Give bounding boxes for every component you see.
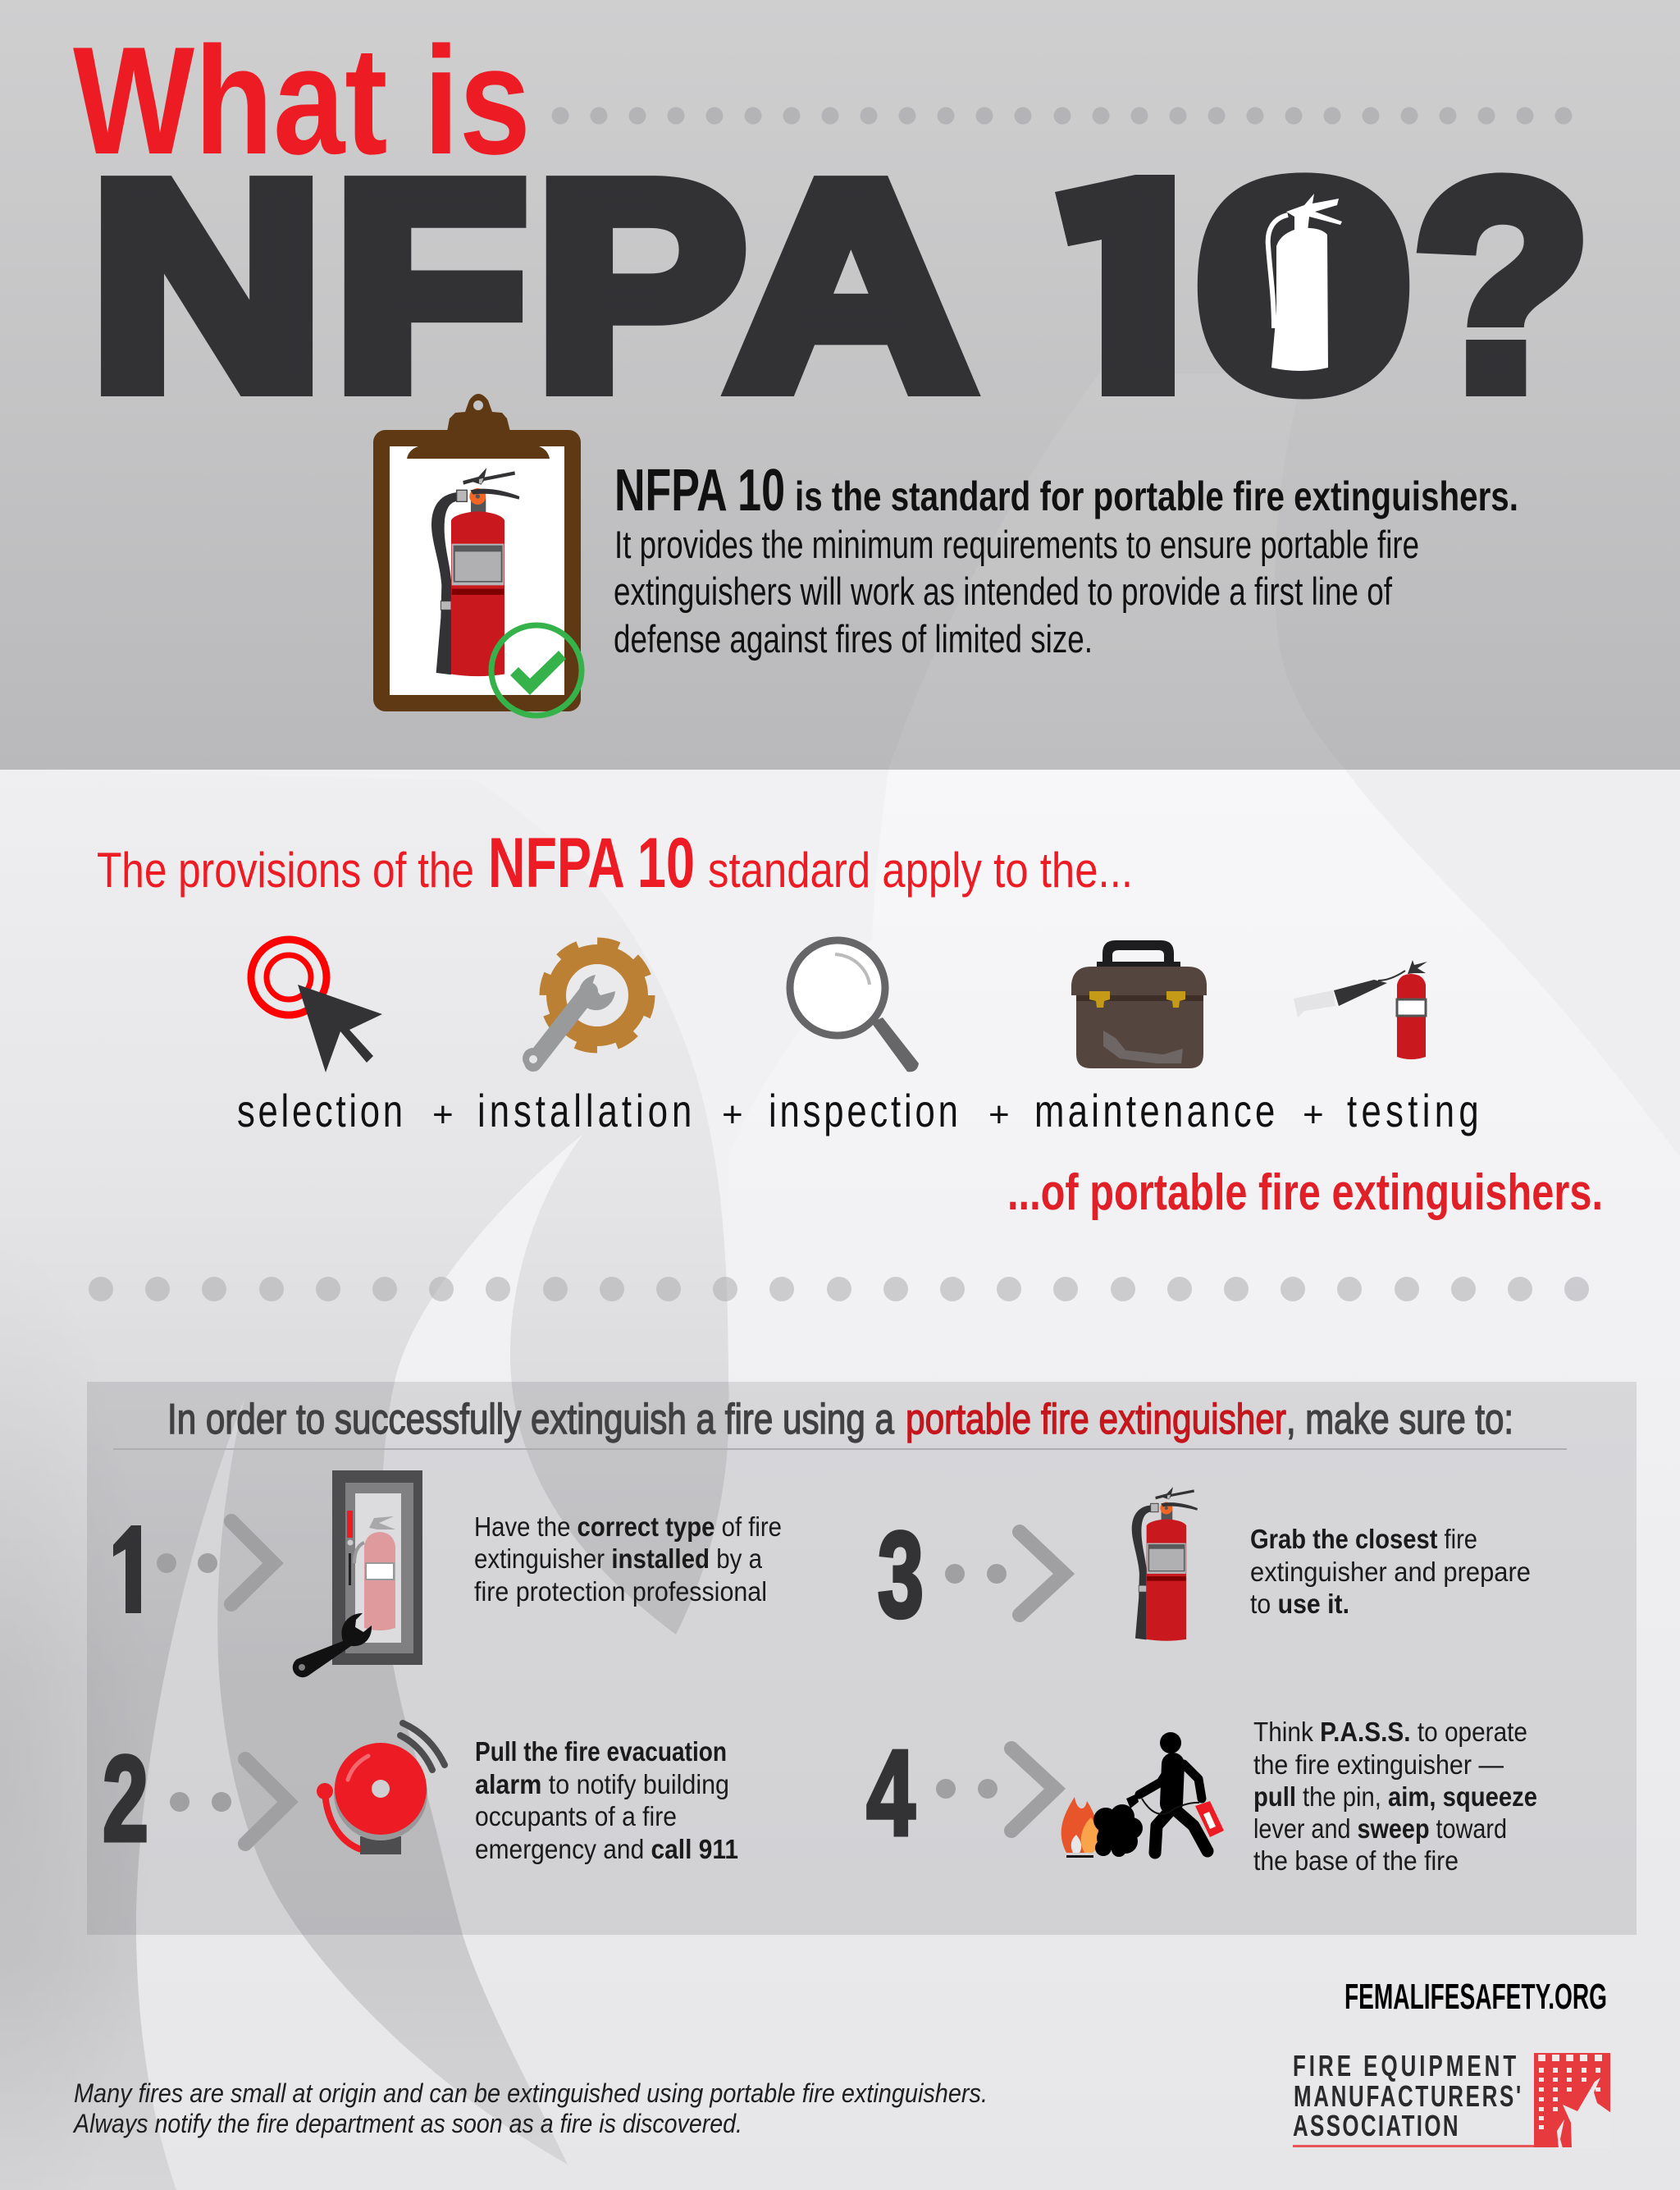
step 3 text: Grab the closest fire: [1250, 1524, 1477, 1554]
step 1 text: extinguisher installed by a: [474, 1543, 763, 1574]
logo: Fire Equipment Manufacturers' Association: FIRE EQUIPMENT: [1293, 2050, 1516, 2083]
labels: selection + installation + inspection + maintenance + testing: [237, 1086, 1479, 1136]
step 4 text: Think P.A.S.S. to operate: [1253, 1717, 1527, 1747]
step 4 text: pull the pin, aim, squeeze: [1253, 1781, 1537, 1812]
icon: selection target and cursor: [251, 940, 382, 1072]
step 2 text: emergency and call 911: [475, 1834, 738, 1864]
labels: selection + installation + inspection + maintenance + testing: selection: [237, 1086, 403, 1136]
step 2 number: 2: [103, 1731, 148, 1867]
labels: selection + installation + inspection + maintenance + testing: +: [988, 1095, 1010, 1135]
labels: selection + installation + inspection + maintenance + testing: testing: [1347, 1086, 1479, 1136]
footer note: [72, 2078, 988, 2138]
panel: steps: [87, 1382, 1637, 1935]
heading: provisions of the standard: NFPA 10: [488, 824, 695, 903]
step 3 text: to use it.: [1250, 1589, 1349, 1619]
logo: Fire Equipment Manufacturers' Association: MANUFACTURERS': [1294, 2080, 1521, 2113]
icon: installation gear and wrench: [523, 944, 649, 1069]
labels: selection + installation + inspection + maintenance + testing: installation: [477, 1086, 692, 1136]
labels: selection + installation + inspection + maintenance + testing: maintenance: [1034, 1086, 1275, 1136]
title: NFPA 10?: [90, 122, 1590, 449]
logo: Fire Equipment Manufacturers' Association: [1293, 2050, 1611, 2148]
step 3 text: extinguisher and prepare: [1250, 1557, 1531, 1587]
step 1 text: [474, 1511, 782, 1607]
step 2 text: Pull the fire evacuation: [475, 1736, 727, 1767]
panel heading: portable fire extinguisher: [906, 1396, 1286, 1443]
step 4 number: 4: [866, 1726, 915, 1861]
step 4 text: the base of the fire: [1253, 1845, 1459, 1876]
text: NFPA 10 definition: extinguishers will work as intended to provide a first line of: [614, 569, 1393, 613]
icon: testing extinguisher with spray: [1294, 960, 1427, 1059]
heading: provisions of the standard: standard apply to the...: [708, 843, 1133, 898]
step 2 text: [475, 1736, 738, 1864]
panel heading: In order to successfully extinguish a fire using a: [167, 1396, 894, 1443]
icon: white extinguisher inside zero: [1268, 194, 1342, 371]
step 4 text: the fire extinguisher —: [1253, 1749, 1504, 1780]
step 3 text: [1250, 1524, 1531, 1619]
step 1 icon: cabinet and wrench: [293, 1470, 422, 1677]
title: NFPA 10?: F: [334, 122, 527, 449]
title: NFPA 10?: 0: [1195, 123, 1413, 449]
title: What is: What is: [73, 15, 531, 186]
logo: Fire Equipment Manufacturers' Association: ASSOCIATION: [1293, 2110, 1459, 2142]
icon: inspection magnifier: [790, 940, 919, 1072]
title: NFPA 10?: ?: [1414, 122, 1590, 449]
step 2 text: alarm to notify building: [475, 1769, 729, 1799]
labels: selection + installation + inspection + maintenance + testing: +: [432, 1095, 454, 1135]
step 3 number: 3: [878, 1506, 924, 1643]
step 2 icon: alarm bell: [317, 1723, 445, 1854]
step 1 text: fire protection professional: [474, 1576, 767, 1607]
icon: clipboard with extinguisher and check: [373, 394, 582, 716]
step 3 arrow: [945, 1532, 1064, 1615]
step 4 arrow: [936, 1749, 1055, 1831]
text: NFPA 10 definition: It provides the minimum requirements to ensure portable fire: [614, 523, 1419, 566]
background: upper grey section: [0, 0, 1680, 770]
text: NFPA 10 definition: [614, 458, 1518, 661]
panel heading: , make sure to:: [1286, 1396, 1513, 1443]
title: NFPA 10?: P: [536, 122, 746, 449]
step 1 number: [113, 1525, 141, 1613]
footer note: Always notify the fire department as soon as a fire is discovered.: [72, 2109, 742, 2138]
footer note: Many fires are small at origin and can be extinguished using portable fire extinguishers.: [74, 2078, 988, 2108]
title: NFPA 10?: A: [728, 122, 974, 449]
step 4 text: [1253, 1717, 1537, 1876]
labels: selection + installation + inspection + maintenance + testing: +: [722, 1095, 743, 1135]
step 3 icon: extinguisher: [1132, 1487, 1198, 1641]
step 2 text: occupants of a fire: [475, 1801, 677, 1831]
text: NFPA 10 definition: defense against fires of limited size.: [614, 617, 1093, 661]
dotted divider middle: [89, 1277, 1589, 1301]
step 1 number: 1: [100, 1501, 146, 1637]
text: NFPA 10 definition: is the standard for portable fire extinguishers.: [795, 473, 1518, 519]
heading: provisions of the standard: [97, 824, 1133, 903]
title: NFPA 10?: N: [90, 122, 323, 449]
labels: selection + installation + inspection + maintenance + testing: inspection: [769, 1086, 958, 1136]
title: NFPA 10?: 1: [1042, 122, 1216, 449]
labels: selection + installation + inspection + maintenance + testing: +: [1303, 1095, 1324, 1135]
heading: provisions of the standard: The provisions of the: [97, 843, 474, 898]
step 2 arrow: [170, 1759, 288, 1844]
panel heading: [167, 1396, 1513, 1443]
step 1 arrow: [157, 1521, 273, 1604]
background: lower light section with flame swirls: [0, 770, 1680, 2190]
dotted divider top: [551, 107, 1572, 125]
text: NFPA 10 definition: NFPA 10: [614, 458, 785, 523]
step 4 icon: person using extinguisher on fire: [1061, 1732, 1224, 1858]
step 1 text: Have the correct type of fire: [474, 1511, 782, 1542]
step 4 text: lever and sweep toward: [1253, 1813, 1507, 1844]
icon: maintenance toolbox: [1071, 940, 1207, 1068]
